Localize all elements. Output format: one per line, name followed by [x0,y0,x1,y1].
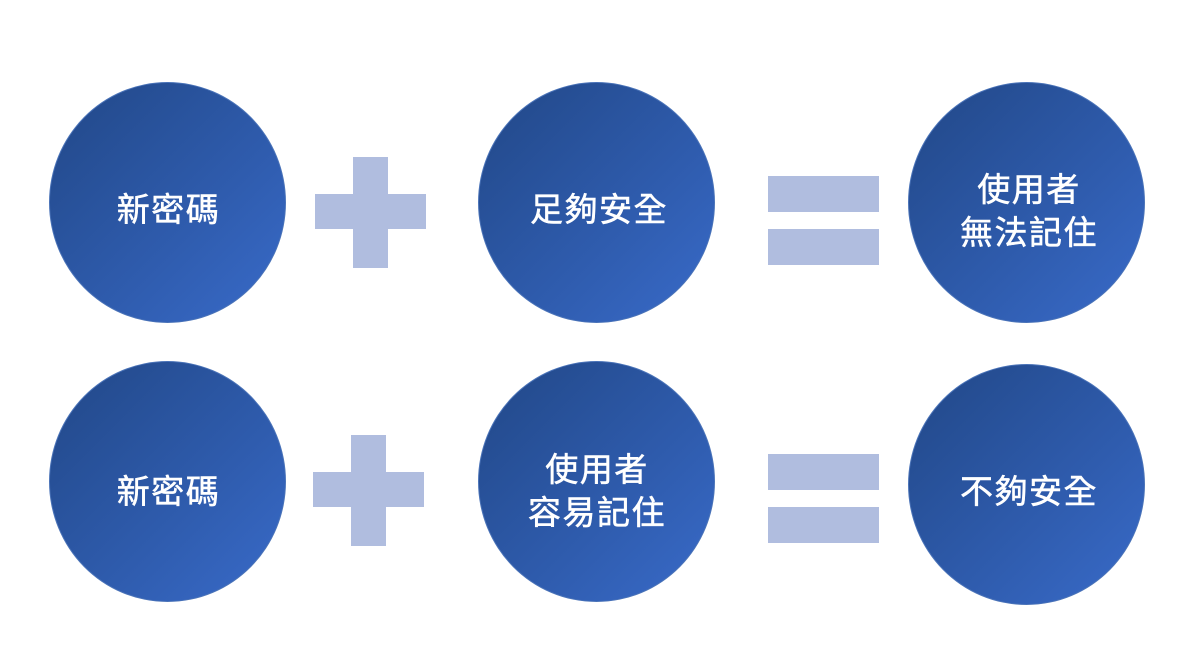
circle: secure enough [478,82,715,323]
circle: new password row 1 [49,82,286,323]
circle: users easily remember [478,361,715,602]
circle: not secure enough: 不夠安全 [960,472,1098,510]
circle: not secure enough [908,364,1145,605]
icon: plus row 2 [313,435,424,546]
circle: new password row 2: 新密碼 [117,472,220,510]
circle: new password row 1: 新密碼 [117,190,220,228]
icon: equals row 1 [768,176,879,265]
circle: new password row 2 [49,361,286,602]
icon: equals row 2 [768,454,879,543]
circle: users cannot remember: 使用者 [977,170,1081,208]
circle: users cannot remember [908,82,1145,323]
circle: users easily remember: 容易記住 [528,494,666,530]
icon: plus row 1 [315,157,426,268]
circle: secure enough: 足夠安全 [530,190,668,228]
circle: users cannot remember: 無法記住 [960,214,1098,250]
circle: users easily remember: 使用者 [545,450,649,488]
